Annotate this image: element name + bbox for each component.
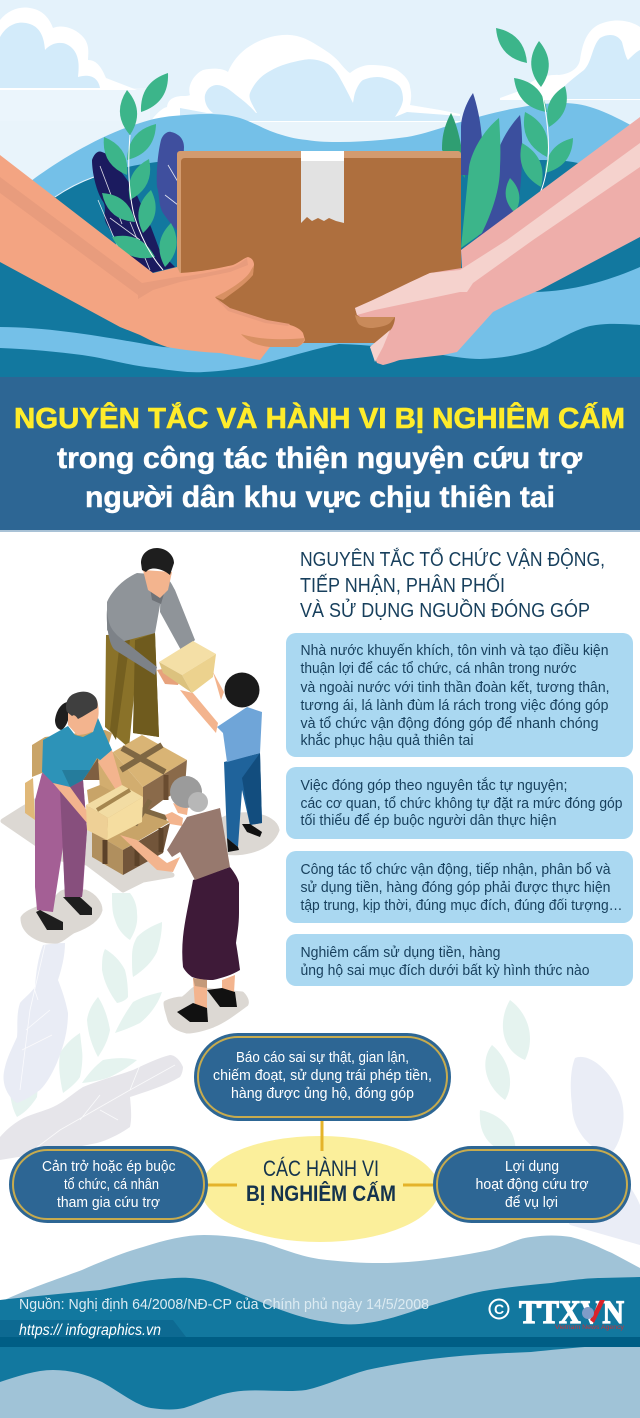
- icon: centre stack of boxes: [87, 735, 187, 875]
- icon: centre cloud: [150, 35, 460, 122]
- centre oval: prohibited acts: [201, 1136, 439, 1242]
- icon: box held by woman: [86, 785, 143, 840]
- icon: right receiving hand: [355, 117, 640, 365]
- icon: right cloud: [500, 20, 640, 100]
- pale background leaves: [0, 893, 640, 1245]
- footer waves: [0, 1235, 640, 1418]
- panel: principle box two: [286, 767, 633, 839]
- panel: principle box three: tập trung, kịp thời, đúng mục đích, đúng đối tượng…: [300, 897, 622, 914]
- icon: box held by man: [159, 641, 216, 693]
- panel: principle box one: [286, 633, 633, 757]
- panel: principle box three: [286, 851, 633, 923]
- icon: packing tape: [301, 151, 344, 223]
- figure: grandmother: [120, 776, 240, 1022]
- panel: principle box one: Nhà nước khuyến khích, tôn vinh và tạo điều kiện: [300, 642, 608, 659]
- panel: title banner: [0, 377, 640, 532]
- panel: principle box three: Công tác tổ chức vận động, tiếp nhận, phân bổ và: [300, 861, 611, 878]
- panel: principle box one: tương ái, lá lành đùm lá rách trong việc đóng góp: [300, 697, 608, 714]
- panel: principle box one: khắc phục hậu quả thiên tai: [300, 732, 474, 749]
- panel: principle box two: tối thiểu để ép buộc người dân thực hiện: [300, 812, 556, 829]
- pill: obstruction: Cản trở hoặc ép buộc: [42, 1159, 176, 1175]
- pill: profiteering: [433, 1146, 631, 1223]
- heading: principles: NGUYÊN TẮC TỔ CHỨC VẬN ĐỘNG,: [300, 547, 605, 571]
- panel: principle box two: các cơ quan, tổ chức không tự đặt ra mức đóng góp: [300, 795, 622, 812]
- heading: principles: VÀ SỬ DỤNG NGUỒN ĐÓNG GÓP: [300, 598, 590, 622]
- logo: TTXVN: C: [494, 1301, 504, 1317]
- pill: profiteering: Lợi dụng: [505, 1159, 559, 1175]
- pill: false reporting: Báo cáo sai sự thật, gian lận,: [236, 1050, 409, 1066]
- title line yellow: NGUYÊN TẮC VÀ HÀNH VI BỊ NGHIÊM CẤM: [14, 401, 625, 435]
- panel: principle box three: sử dụng tiền, hàng đóng góp phải được thực hiện: [300, 879, 610, 896]
- subtitle line one: trong công tác thiện nguyện cứu trợ: [57, 442, 583, 475]
- connector lines: [208, 1121, 433, 1186]
- panel: principle box four: ủng hộ sai mục đích dưới bất kỳ hình thức nào: [300, 962, 590, 979]
- heading: principles: TIẾP NHẬN, PHÂN PHỐI: [300, 573, 505, 597]
- floor shadows: [3, 800, 277, 1031]
- panel: principle box one: thuận lợi để các tổ chức, cá nhân trong nước: [300, 660, 577, 677]
- panel: principle box one: và tổ chức vận động đóng góp để nhanh chóng: [300, 715, 598, 732]
- logo: TTXVN: Vietnam News Agency: [555, 1325, 624, 1331]
- centre oval: prohibited acts: CÁC HÀNH VI: [263, 1156, 379, 1181]
- pill: false reporting: chiếm đoạt, sử dụng trái phép tiền,: [213, 1068, 432, 1084]
- pill: false reporting: [194, 1033, 451, 1121]
- figure: boy: [180, 672, 262, 852]
- centre oval: prohibited acts: BỊ NGHIÊM CẤM: [246, 1181, 396, 1206]
- figure: woman: [35, 692, 122, 930]
- pill: obstruction: tham gia cứu trợ: [57, 1195, 160, 1211]
- panel: principle box four: [286, 934, 633, 986]
- pill: false reporting: hàng được ủng hộ, đóng góp: [231, 1086, 414, 1102]
- website tab: https:// infographics.vn: [19, 1322, 161, 1339]
- heading: principles: [300, 547, 605, 622]
- icon: left giving hand: [0, 155, 305, 360]
- pill: profiteering: hoạt động cứu trợ: [476, 1177, 589, 1193]
- panel: volunteers illustration: [3, 548, 277, 1031]
- pill: obstruction: tổ chức, cá nhân: [64, 1177, 159, 1193]
- icon: cardboard box: [177, 151, 461, 343]
- pill: profiteering: để vụ lợi: [505, 1195, 558, 1211]
- plants: right foliage: [442, 28, 573, 290]
- pill: obstruction: [9, 1146, 208, 1223]
- subtitle line two: người dân khu vực chịu thiên tai: [85, 481, 555, 514]
- panel: principle box one: và ngoài nước với tinh thần đoàn kết, tương thân,: [300, 679, 610, 696]
- figure: man: [105, 548, 195, 748]
- source note: Nguồn: Nghị định 64/2008/NĐ-CP của Chính phủ ngày 14/5/2008: [19, 1296, 429, 1313]
- panel: hero illustration: [0, 0, 640, 378]
- panel: principle box two: Việc đóng góp theo nguyên tắc tự nguyện;: [300, 777, 568, 794]
- logo: TTXVN: TTXVN: [519, 1295, 624, 1331]
- icon: back boxes: [25, 730, 112, 820]
- hills and water: [0, 103, 640, 377]
- panel: principle box four: Nghiêm cấm sử dụng tiền, hàng: [300, 944, 500, 961]
- plants: left foliage: [92, 73, 184, 273]
- icon: left cloud: [0, 8, 137, 90]
